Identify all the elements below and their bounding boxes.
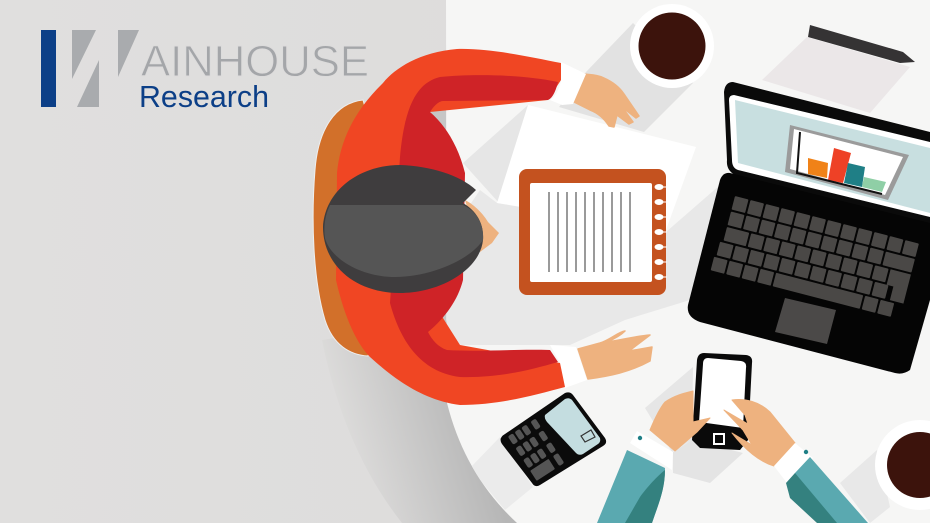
chair [313, 100, 400, 356]
cuffs [630, 431, 813, 487]
sweater shadow [390, 75, 558, 377]
bar chart [797, 132, 886, 194]
cuffs [550, 62, 587, 388]
icon: calculator [501, 392, 606, 486]
icon: paper sheet [497, 105, 696, 230]
icon: pen [808, 25, 915, 63]
right sleeve [786, 457, 868, 523]
keyboard [711, 195, 919, 319]
chart window [785, 125, 909, 200]
hair highlight [324, 205, 483, 277]
logo subtitle: Research [139, 79, 269, 114]
face [465, 200, 499, 252]
table shadows [446, 23, 910, 523]
laptop lid [724, 82, 930, 225]
laptop [688, 82, 930, 374]
inner corner shadow behind arms [428, 101, 446, 350]
icon: smartphone [692, 353, 752, 450]
left sleeve [597, 450, 665, 523]
logo [41, 30, 369, 114]
logo wordmark: AINHOUSE [141, 37, 369, 86]
hands holding phone [650, 391, 795, 466]
laptop bezel [729, 95, 930, 217]
laptop base [688, 173, 930, 374]
icon: notebook tablet [519, 169, 667, 295]
icon: coffee cup top [630, 4, 714, 88]
cuff buttons [638, 436, 808, 454]
touchpad [775, 298, 836, 344]
person at desk [313, 49, 652, 405]
panel: white table [446, 0, 930, 523]
sweater [336, 49, 565, 405]
logo mark [41, 30, 139, 107]
hair [323, 165, 483, 293]
laptop screen [735, 100, 930, 213]
icon: coffee cup bottom [875, 420, 930, 510]
hands of person [383, 74, 652, 379]
